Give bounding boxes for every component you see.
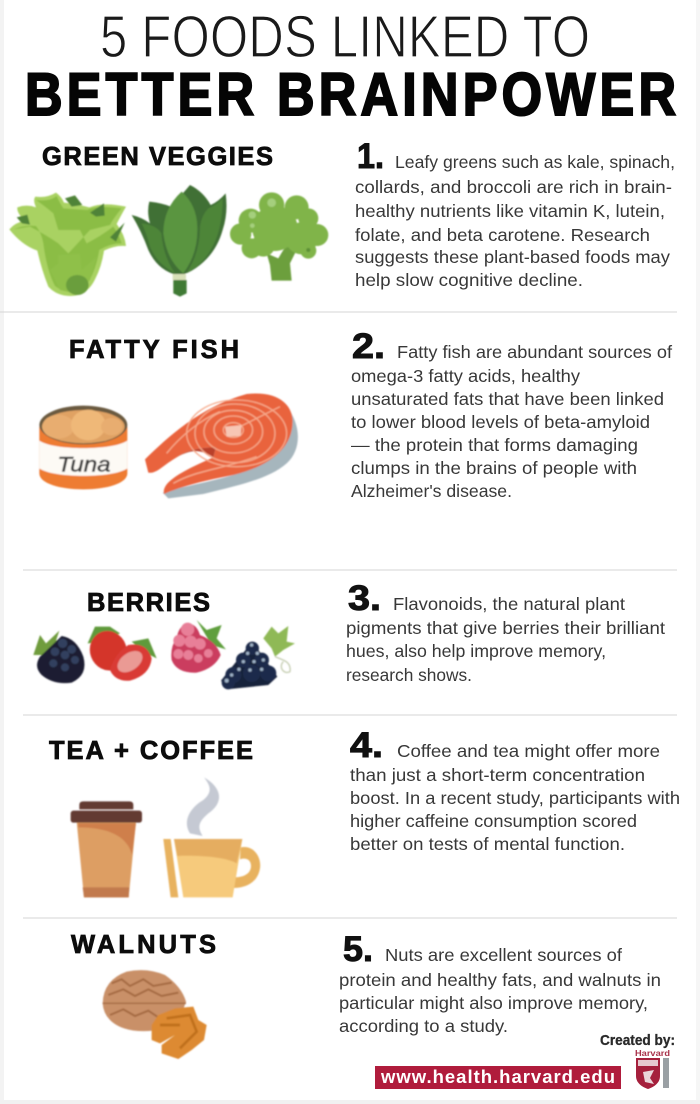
- icon: tuna can: Tuna: [57, 453, 111, 477]
- panel: walnuts: [71, 930, 661, 1059]
- heading: berries: BERRIES: [87, 589, 210, 617]
- text block: walnuts: [339, 930, 661, 1036]
- heading: walnuts: WALNUTS: [71, 931, 216, 959]
- text block: fatty fish: — the protein that forms damaging: [351, 435, 638, 455]
- title: [25, 3, 676, 128]
- icon: walnut: [103, 970, 207, 1059]
- panel: tea + coffee: [49, 726, 680, 897]
- title: BETTER BRAINPOWER: [25, 60, 676, 128]
- icon: harvard health logo: Harvard: [635, 1049, 670, 1058]
- heading: fatty fish: FATTY FISH: [69, 336, 239, 364]
- text block: walnuts: protein and healthy fats, and walnuts in: [339, 970, 661, 990]
- text block: green veggies: suggests these plant-based foods may: [355, 247, 670, 267]
- text block: walnuts: 5.: [343, 930, 373, 969]
- text block: berries: [346, 579, 665, 685]
- text block: tea + coffee: higher caffeine consumption scored: [350, 811, 637, 831]
- text block: green veggies: [355, 137, 675, 290]
- text block: walnuts: Nuts are excellent sources of: [385, 945, 622, 965]
- panel: berries: [33, 579, 665, 689]
- text block: fatty fish: [351, 327, 672, 501]
- text block: fatty fish: 2.: [352, 327, 385, 366]
- icon: coffee cup and teacup: [71, 777, 260, 897]
- text block: walnuts: according to a study.: [339, 1016, 508, 1036]
- url banner: www.health.harvard.edu: [380, 1066, 615, 1087]
- text block: tea + coffee: better on tests of mental function.: [350, 834, 625, 854]
- text block: fatty fish: Alzheimer's disease.: [351, 481, 512, 501]
- heading: green veggies: GREEN VEGGIES: [42, 143, 273, 171]
- text block: fatty fish: unsaturated fats that have been linked: [351, 389, 664, 409]
- text block: fatty fish: omega-3 fatty acids, healthy: [351, 366, 580, 386]
- text block: berries: 3.: [348, 579, 381, 618]
- text block: green veggies: 1.: [357, 137, 384, 176]
- text block: fatty fish: to lower blood levels of beta-amyloid: [351, 412, 650, 432]
- text block: green veggies: Leafy greens such as kale, spinach,: [395, 152, 675, 172]
- heading: tea + coffee: TEA + COFFEE: [49, 737, 253, 765]
- text block: green veggies: collards, and broccoli are rich in brain-: [355, 177, 672, 197]
- panel: green veggies: [9, 137, 675, 297]
- text block: green veggies: folate, and beta carotene. Research: [355, 225, 650, 245]
- text block: tea + coffee: Coffee and tea might offer more: [397, 741, 660, 761]
- text block: berries: research shows.: [346, 665, 472, 685]
- text block: berries: hues, also help improve memory,: [346, 641, 606, 661]
- icon: lettuce, spinach and broccoli: [9, 185, 328, 297]
- text block: berries: Flavonoids, the natural plant: [393, 594, 625, 614]
- text block: fatty fish: Fatty fish are abundant sources of: [397, 342, 672, 362]
- panel: fatty fish: [39, 327, 672, 501]
- text block: tea + coffee: [350, 726, 680, 854]
- text block: tea + coffee: than just a short-term concentration: [350, 765, 645, 785]
- icon: salmon steak: [145, 393, 298, 498]
- text block: tea + coffee: 4.: [350, 726, 383, 765]
- text block: walnuts: particular might also improve memory,: [339, 993, 648, 1013]
- title: 5 FOODS LINKED TO: [100, 3, 590, 70]
- icon: tuna can: [39, 406, 127, 489]
- text block: tea + coffee: boost. In a recent study, participants with: [350, 788, 680, 808]
- text block: fatty fish: clumps in the brains of people with: [351, 458, 637, 478]
- text block: berries: pigments that give berries their brilliant: [346, 618, 665, 638]
- credit: created by: Created by:: [600, 1033, 675, 1049]
- text block: green veggies: help slow cognitive decline.: [355, 270, 583, 290]
- icon: harvard health logo: [635, 1049, 670, 1089]
- icon: four berries: [33, 620, 295, 689]
- text block: green veggies: healthy nutrients like vitamin K, lutein,: [355, 201, 665, 221]
